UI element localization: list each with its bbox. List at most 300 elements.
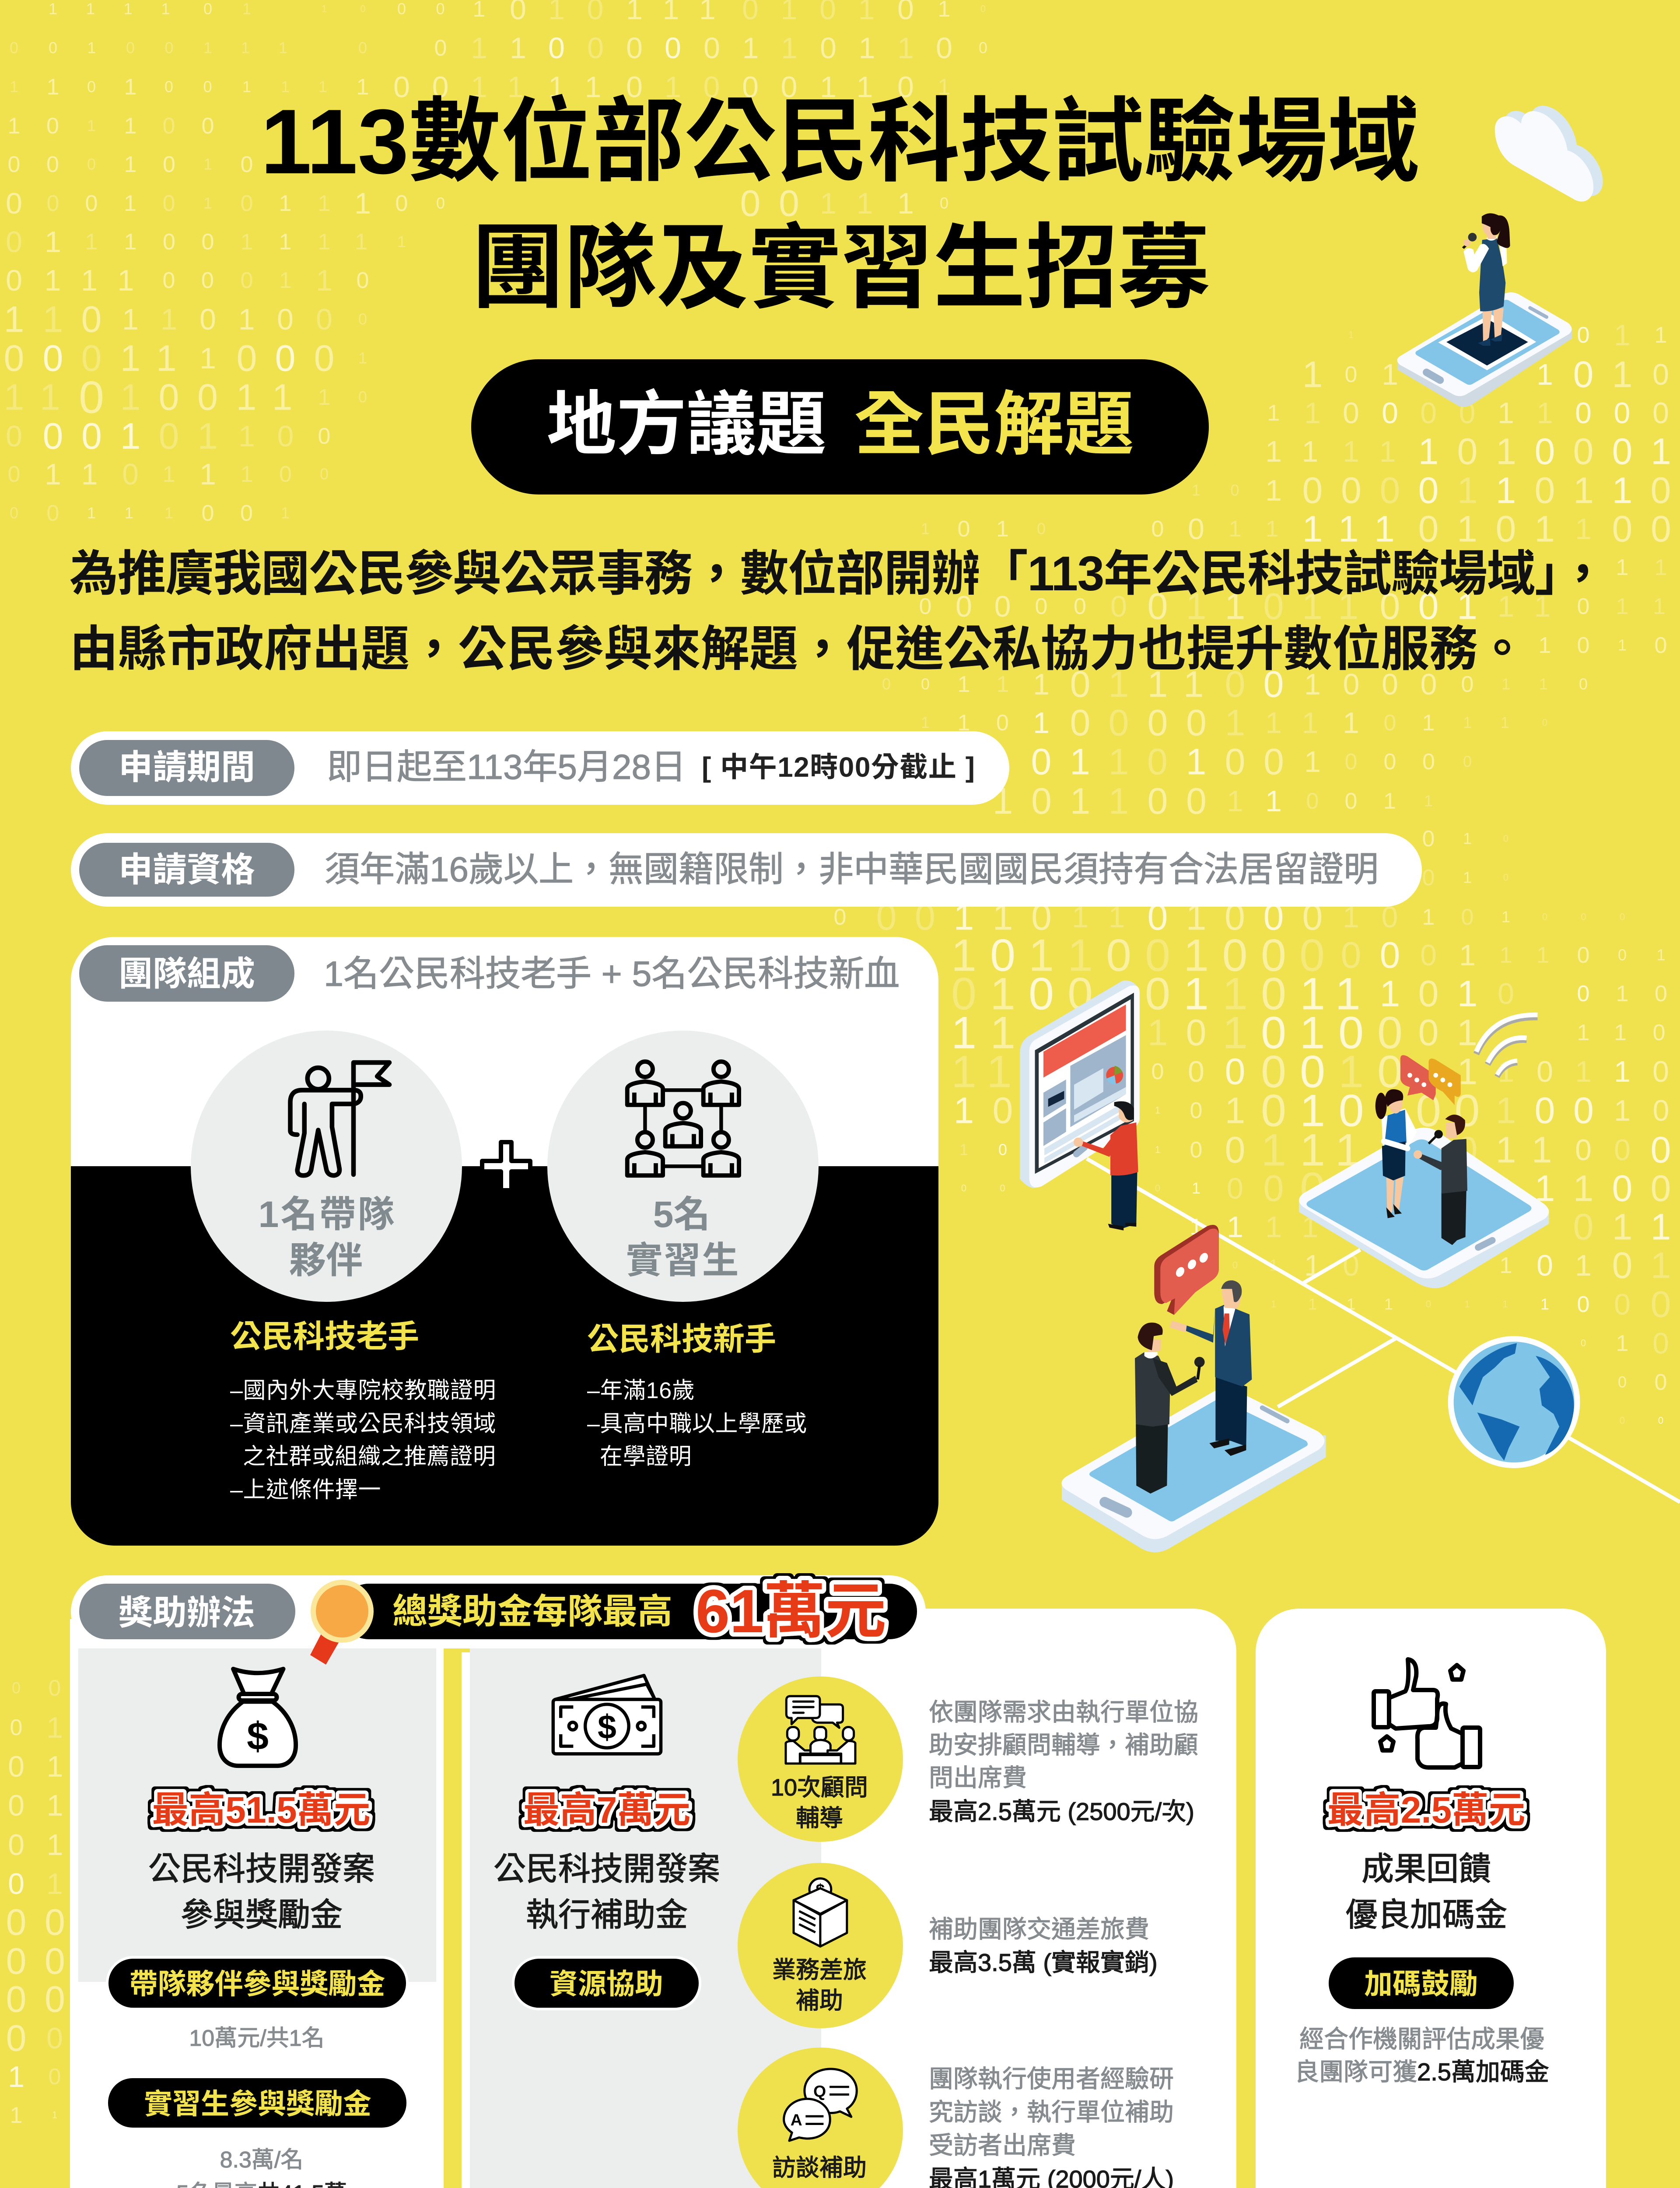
background binary digits: 0101 (1418, 508, 1573, 549)
background binary digits: 1 (957, 672, 996, 697)
illustration: digital connections (1020, 981, 1680, 1552)
background binary digits: 0 (6, 187, 45, 220)
background binary digits: 1 (1269, 1256, 1308, 1274)
background binary digits: 00 (1575, 396, 1652, 430)
eligibility row: 須年滿16歲以上，無國籍限制，非中華民國國民須持有合法居留證明 (325, 850, 1379, 889)
background binary digits: 1 (1612, 470, 1651, 511)
icon: Q and A bubbles (784, 2069, 857, 2141)
background binary digits: 0 (1261, 1046, 1300, 1097)
background binary digits: 1 (45, 225, 84, 259)
background binary digits: 1 (959, 1141, 998, 1159)
panel: rewards 1 participation (70, 1619, 444, 2188)
reward 3 content (1295, 1659, 1549, 2086)
icon: globe (1448, 1336, 1580, 1468)
background binary digits: 0 (356, 268, 395, 293)
background binary digits: 0 (1106, 930, 1145, 981)
background binary digits: 0 (320, 465, 359, 483)
background binary digits: 00 (6, 1940, 84, 1981)
reward 3 content: 成果回饋 (1362, 1851, 1491, 1887)
background binary digits: 1 (1614, 319, 1653, 352)
background binary digits: 1 (1575, 512, 1614, 546)
text: travel details: 最高3.5萬 (實報實銷) (929, 1949, 1158, 1976)
background binary digits: 01 (49, 39, 126, 57)
background binary digits: 0 (396, 191, 434, 216)
background binary digits: 0 (1536, 1249, 1575, 1282)
icon: banknotes (553, 1676, 661, 1754)
title: 團隊及實習生招募 (472, 216, 1210, 319)
background binary digits: 00 (6, 1978, 84, 2020)
background binary digits: 0 (587, 32, 626, 65)
background binary digits: 10 (1300, 1085, 1377, 1136)
eligibility row (71, 833, 1422, 907)
background binary digits: 0 (48, 1676, 87, 1701)
background binary digits: 010 (1261, 1007, 1377, 1058)
background binary digits: 0 (43, 337, 81, 379)
item: mentoring (738, 1676, 903, 1842)
background binary digits: 0 (434, 35, 473, 61)
background binary digits: 0 (10, 504, 49, 522)
background binary digits: 0 (1380, 934, 1418, 975)
background binary digits: 0 (8, 1867, 47, 1900)
background binary digits: 1 (1612, 1206, 1651, 1247)
background binary digits: 1 (1033, 668, 1072, 701)
background binary digits: 0 (1457, 1129, 1496, 1170)
background binary digits: 1 (1536, 396, 1575, 430)
background binary digits: 0 (1264, 896, 1302, 937)
item: interview: 訪談補助 (772, 2155, 867, 2181)
background binary digits: 0 (1463, 753, 1502, 771)
item: interview (738, 2048, 903, 2188)
background binary digits: 101 (993, 780, 1109, 821)
background binary digits: 1 (120, 376, 159, 417)
background binary digits: 0 (237, 337, 275, 379)
rewards header (71, 1575, 926, 1665)
background binary digits: 11 (120, 337, 195, 379)
background binary digits: 0 (358, 310, 397, 328)
background binary digits: 1 (781, 32, 820, 65)
background binary digits: 1 (954, 896, 992, 937)
background binary digits: 0 (665, 32, 704, 65)
background binary digits: 01 (241, 268, 318, 293)
icon: money bag (220, 1669, 296, 1766)
background binary digits: 0 (1264, 663, 1302, 705)
reward 2 content: 最高7萬元 (523, 1789, 690, 1830)
background binary digits: 1 (1227, 1210, 1266, 1244)
background binary digits: 10 (8, 113, 85, 139)
background binary digits: 1 (43, 298, 81, 340)
background binary digits: 0 (1264, 1168, 1302, 1209)
background binary digits: 00 (1416, 1085, 1493, 1136)
background binary digits: 00 (163, 268, 240, 293)
background binary digits: 0 (1461, 672, 1500, 697)
text: interview details (929, 2065, 1174, 2188)
icon: cloud (1495, 105, 1603, 202)
background binary digits: 0 (1186, 1012, 1225, 1053)
background binary digits: 11 (1498, 590, 1573, 623)
background binary digits: 1 (1267, 400, 1306, 426)
background binary digits: 0 (46, 501, 85, 526)
background binary digits: 1 (1457, 1051, 1496, 1092)
background binary digits: 1 (1616, 1331, 1655, 1356)
background binary digits: 001 (43, 415, 159, 456)
background binary digits: 1 (1575, 1055, 1614, 1088)
background binary digits: 0 (1155, 1183, 1194, 1194)
background binary digits: 0 (626, 70, 665, 104)
background binary digits: 0 (1581, 1338, 1619, 1349)
background binary digits: 1 (52, 2110, 91, 2121)
background binary digits: 0 (1302, 896, 1341, 937)
reward 3 content: 良團隊可獲2.5萬加碼金 (1295, 2058, 1549, 2086)
background binary digits: 0 (48, 2064, 87, 2090)
background binary digits: 1 (124, 74, 163, 100)
background binary digits: 1 (1155, 1144, 1194, 1155)
background binary digits: 00 (1225, 741, 1302, 782)
background binary digits: 0 (1152, 1059, 1190, 1084)
background binary digits: 1 (358, 349, 397, 367)
background binary digits: 0 (1190, 1098, 1228, 1123)
background binary digits: 0 (1225, 1051, 1264, 1092)
background binary digits: 0 (1573, 431, 1612, 472)
background binary digits: 00 (1302, 470, 1380, 511)
background binary digits: 10 (1109, 741, 1186, 782)
background binary digits: 11 (1500, 943, 1575, 968)
background binary digits: 0011 (159, 376, 311, 417)
background binary digits: 0 (314, 337, 353, 379)
background binary digits: 01 (1457, 431, 1535, 472)
background binary digits: 1 (1304, 396, 1343, 430)
background binary digits: 1 (1538, 633, 1577, 658)
background binary digits: 0 (1232, 1260, 1271, 1271)
background binary digits: 0 (1498, 977, 1536, 1010)
background binary digits: 0 (81, 337, 120, 379)
background binary digits: 0 (1503, 833, 1542, 844)
background binary digits: 0 (318, 424, 357, 449)
background binary digits: 1 (1424, 792, 1463, 810)
text: mentoring details (929, 1698, 1198, 1825)
background binary digits: 1 (1029, 930, 1068, 981)
background binary digits: 0 (1068, 968, 1106, 1019)
background binary digits: 10 (665, 70, 742, 104)
reward 1 content: 8.3萬/名 (220, 2147, 303, 2173)
icon: phone platform (1397, 292, 1572, 407)
badge: bonus (1329, 1957, 1514, 2009)
background binary digits: 1 (8, 2060, 47, 2093)
background binary digits: 1 (1109, 780, 1147, 821)
icon: large speech bubble (1154, 1225, 1219, 1315)
background binary digits: 0 (919, 594, 958, 619)
background binary digits: 11 (1300, 968, 1374, 1019)
icon: phone with two people (1299, 1128, 1549, 1288)
background binary digits: 0 (834, 905, 872, 930)
background binary digits: 1 (1304, 745, 1343, 778)
background binary digits: 0 (241, 152, 279, 177)
background binary digits: 0 (1418, 973, 1457, 1014)
text: mentoring details: 依團隊需求由執行單位協 (929, 1698, 1198, 1726)
background binary digits: 1 (1575, 1249, 1614, 1282)
intro text: 為推廣我國公民參與公眾事務，數位部開辦「113年公民科技試驗場域」， (70, 547, 1607, 601)
background binary digits: 11 (1228, 516, 1305, 542)
background binary digits: 00 (1420, 396, 1498, 430)
background binary digits: 1 (1463, 869, 1502, 887)
background binary digits: 0 (936, 32, 975, 65)
background binary digits: 0 (626, 32, 665, 65)
background binary digits: 1 (1304, 1249, 1343, 1282)
background binary digits: 1 (203, 155, 242, 173)
background binary digits: 11 (87, 504, 163, 522)
background binary digits: 0 (1418, 470, 1457, 511)
intro text: 由縣市政府出題，公民參與來解題，促進公私協力也提升數位服務。 (70, 622, 1526, 676)
background binary digits: 1 (316, 264, 355, 297)
background binary digits: 0 (897, 70, 936, 104)
background binary digits: 1 (1338, 1046, 1377, 1097)
veteran requirements: –資訊產業或公民科技領域 (230, 1411, 496, 1437)
background binary digits: 0 (1377, 1007, 1416, 1058)
background binary digits: 1 (938, 74, 976, 100)
background binary digits: 0 (6, 225, 45, 259)
background binary digits: 1 (1500, 1253, 1538, 1278)
background binary digits: 1 (1227, 785, 1266, 818)
background binary digits: 1 (87, 117, 126, 135)
background binary digits: 1111 (49, 0, 200, 18)
background binary digits: 00 (164, 78, 242, 96)
background binary digits: 1 (1457, 973, 1496, 1014)
background binary digits: 1 (1422, 710, 1461, 736)
background binary digits: 1 (1496, 1090, 1534, 1131)
background binary digits: 0 (87, 155, 126, 173)
background binary digits: 0 (1261, 968, 1300, 1019)
application period row: [ 中午12時00分截止 ] (702, 751, 975, 783)
background binary digits: 0 (81, 298, 120, 340)
background binary digits: 10 (1343, 901, 1420, 934)
background binary digits: 1 (1190, 1214, 1228, 1240)
background binary digits: 11 (548, 70, 623, 104)
background binary digits: 0 (1070, 702, 1109, 743)
background binary digits: 0 (163, 191, 201, 216)
background binary digits: 1 (1535, 1168, 1573, 1209)
background binary digits: 00 (1148, 702, 1225, 743)
background binary digits: 0 (940, 194, 979, 212)
background binary digits: 00 (8, 152, 85, 177)
background binary digits: 1 (279, 191, 318, 216)
rewards header: 61萬元 (696, 1577, 886, 1645)
background binary digits: 1 (921, 520, 960, 538)
background binary digits: 1 (1614, 1055, 1653, 1088)
background binary digits: 0 (998, 1141, 1037, 1159)
background binary digits: 1 (1308, 1295, 1347, 1313)
background binary digits: 1 (203, 194, 242, 212)
background binary digits: 1 (1192, 1179, 1231, 1197)
background binary digits: 1 (4, 298, 42, 340)
person: interviewer (1414, 1115, 1467, 1245)
slogan pill: 全民解題 (854, 385, 1134, 463)
background binary digits: 1 (241, 229, 279, 255)
background binary digits: 11 (1496, 1129, 1570, 1170)
person: interviewee woman (1376, 1089, 1417, 1218)
background binary digits: 0 (1383, 710, 1422, 736)
reward 1 content: 最高51.5萬元 (152, 1789, 371, 1830)
background binary digits: 00 (740, 182, 818, 224)
background binary digits: 0 (1341, 934, 1379, 975)
text: travel details: 補助團隊交通差旅費 (929, 1915, 1149, 1943)
background binary digits: 10 (957, 710, 1035, 736)
background binary digits: 01 (704, 32, 781, 65)
background binary digits: 0 (1227, 1172, 1266, 1205)
background binary digits: 00 (956, 590, 1033, 623)
item: mentoring: 輔導 (796, 1805, 843, 1831)
background binary digits: 1 (242, 78, 281, 96)
background binary digits: 11 (318, 229, 394, 255)
background binary digits: 0 (1577, 323, 1616, 348)
badge: bonus: 加碼鼓勵 (1364, 1968, 1478, 2000)
circle: interns: 實習生 (626, 1240, 740, 1281)
background binary digits: 1 (1616, 555, 1655, 580)
background binary digits: 0 (1110, 590, 1149, 623)
background binary digits: 1 (1418, 431, 1457, 472)
background binary digits: 0 (79, 372, 118, 423)
background binary digits: 0 (1225, 1129, 1264, 1170)
background binary digits: 0 (1380, 470, 1418, 511)
background binary digits: 0 (87, 78, 126, 96)
label: application period: 申請期間 (119, 748, 255, 786)
icon: small speech bubbles (1400, 1055, 1461, 1105)
background binary digits: 10 (238, 420, 316, 453)
background binary digits: 1 (897, 32, 936, 65)
background binary digits: 11 (1072, 901, 1147, 934)
background binary digits: 0 (1422, 826, 1461, 852)
background binary digits: 00 (1383, 749, 1461, 775)
background binary digits: 1 (1573, 1168, 1612, 1209)
text: interview details: 團隊執行使用者經驗研 (929, 2065, 1174, 2093)
background binary digits: 0 (1152, 516, 1190, 542)
background binary digits: 0 (1145, 930, 1184, 981)
text: mentoring details: 最高2.5萬元 (2500元/次) (929, 1798, 1194, 1825)
background binary digits: 1 (1496, 470, 1534, 511)
background binary digits: 0 (1614, 1288, 1653, 1321)
background binary digits: 1 (1265, 474, 1304, 507)
background binary digits: 0 (1614, 1133, 1653, 1167)
background binary digits: 11 (1265, 435, 1340, 468)
reward 1 content: 公民科技開發案 (148, 1851, 375, 1887)
background binary digits: 1 (1186, 586, 1225, 627)
background binary digits: 1 (164, 504, 203, 522)
veteran requirements (230, 1319, 496, 1503)
background binary digits: 0 (275, 337, 314, 379)
icon: medal (310, 1580, 374, 1665)
text: travel details (929, 1915, 1158, 1976)
background binary digits: 111 (1302, 508, 1413, 549)
icon: box with coin (794, 1879, 847, 1946)
connection lines (1087, 1159, 1680, 1502)
item: travel: 業務差旅 (772, 1957, 867, 1983)
background binary digits: 1 (1348, 330, 1387, 340)
background binary digits: 1 (510, 32, 549, 65)
veteran requirements: 公民科技老手 (230, 1319, 419, 1354)
background binary digits: 1 (1618, 636, 1657, 654)
badge: team lead grant: 帶隊夥伴參與獎勵金 (129, 1968, 385, 2000)
background binary digits: 0 (1261, 1085, 1300, 1136)
background binary digits: 0 (1145, 968, 1184, 1019)
background binary digits: 01 (1345, 789, 1422, 814)
background binary digits: 1 (1271, 1299, 1309, 1310)
label: team composition (79, 945, 294, 1002)
reward 2 content: 執行補助金 (526, 1897, 688, 1933)
background binary digits: 00 (397, 0, 475, 18)
background binary digits: 0111 (6, 264, 156, 297)
background binary digits: 0 (1148, 586, 1186, 627)
background binary digits: 0 (1343, 1249, 1382, 1282)
background binary digits: 1 (1222, 968, 1261, 1019)
background binary digits: 1 (1186, 741, 1225, 782)
background binary digits: 0 (1299, 930, 1338, 981)
background binary digits: 0 (1306, 789, 1345, 814)
background binary digits: 1 (318, 191, 357, 216)
background binary digits: 0 (1503, 872, 1542, 883)
illustration: cloud and woman on phone (1397, 105, 1603, 407)
title: 113數位部公民科技試驗場域 (261, 90, 1419, 193)
background binary digits: 11 (951, 1046, 1025, 1097)
background binary digits: 1000 (1304, 668, 1459, 701)
background binary digits: 0 (316, 303, 355, 336)
background binary digits: 100 (1183, 930, 1300, 981)
background binary digits: 1 (1612, 354, 1651, 395)
reward 2 content (494, 1676, 1198, 2188)
application period row: 即日起至113年5月28日 (327, 747, 686, 786)
application period row (71, 731, 1009, 805)
background binary digits: 11 (1265, 706, 1340, 740)
background binary digits: 0 (1070, 663, 1109, 705)
background binary digits: 1 (1459, 939, 1498, 972)
background binary digits: 1 (354, 187, 393, 220)
background binary digits: 1 (1380, 973, 1418, 1014)
background binary digits: 0 (46, 191, 85, 216)
background binary digits: 0 (1579, 675, 1618, 693)
label: eligibility (79, 843, 294, 897)
background binary digits: 1 (951, 1007, 990, 1058)
icon: plus (482, 1142, 530, 1190)
background binary digits: 00 (1148, 780, 1225, 821)
background binary digits: 1 (990, 968, 1029, 1019)
background binary digits: 01 (8, 1828, 85, 1862)
background binary digits: 10 (322, 4, 399, 14)
background binary digits: 0 (6, 420, 45, 453)
background binary digits: 0 (1029, 968, 1068, 1019)
veteran requirements: –上述條件擇一 (230, 1477, 381, 1503)
background binary digits: 11 (45, 458, 120, 491)
icon: woman with microphone (1462, 213, 1510, 346)
background binary digits: 011 (1426, 1299, 1541, 1310)
background binary digits: 0 (990, 930, 1029, 981)
background binary digits: 1 (163, 462, 201, 487)
item: mentoring: 10次顧問 (771, 1774, 868, 1801)
background binary digits: 1 (951, 930, 990, 981)
slogan pill: 地方議題 (546, 385, 826, 463)
background binary digits: 0 (1343, 396, 1382, 430)
background binary digits: 0 (882, 675, 921, 693)
background binary digits: 0 (1037, 520, 1076, 538)
background binary digits: 00 (742, 70, 819, 104)
intro text (70, 547, 1607, 676)
circle: interns (547, 1031, 819, 1302)
background binary digits: 1 (1265, 785, 1304, 818)
background binary digits: 0 (1577, 943, 1616, 968)
background binary digits: 0 (993, 1090, 1031, 1131)
badge: resource support (513, 1957, 700, 2009)
icon: Q and A bubbles: Q (813, 2082, 826, 2100)
panel: team composition: 1名公民科技老手 + 5名公民科技新血 (324, 954, 900, 994)
background binary digits: 01 (1418, 586, 1496, 627)
reward 1 content: 10萬元/共1名 (189, 2026, 325, 2051)
label: team composition: 團隊組成 (119, 954, 255, 993)
